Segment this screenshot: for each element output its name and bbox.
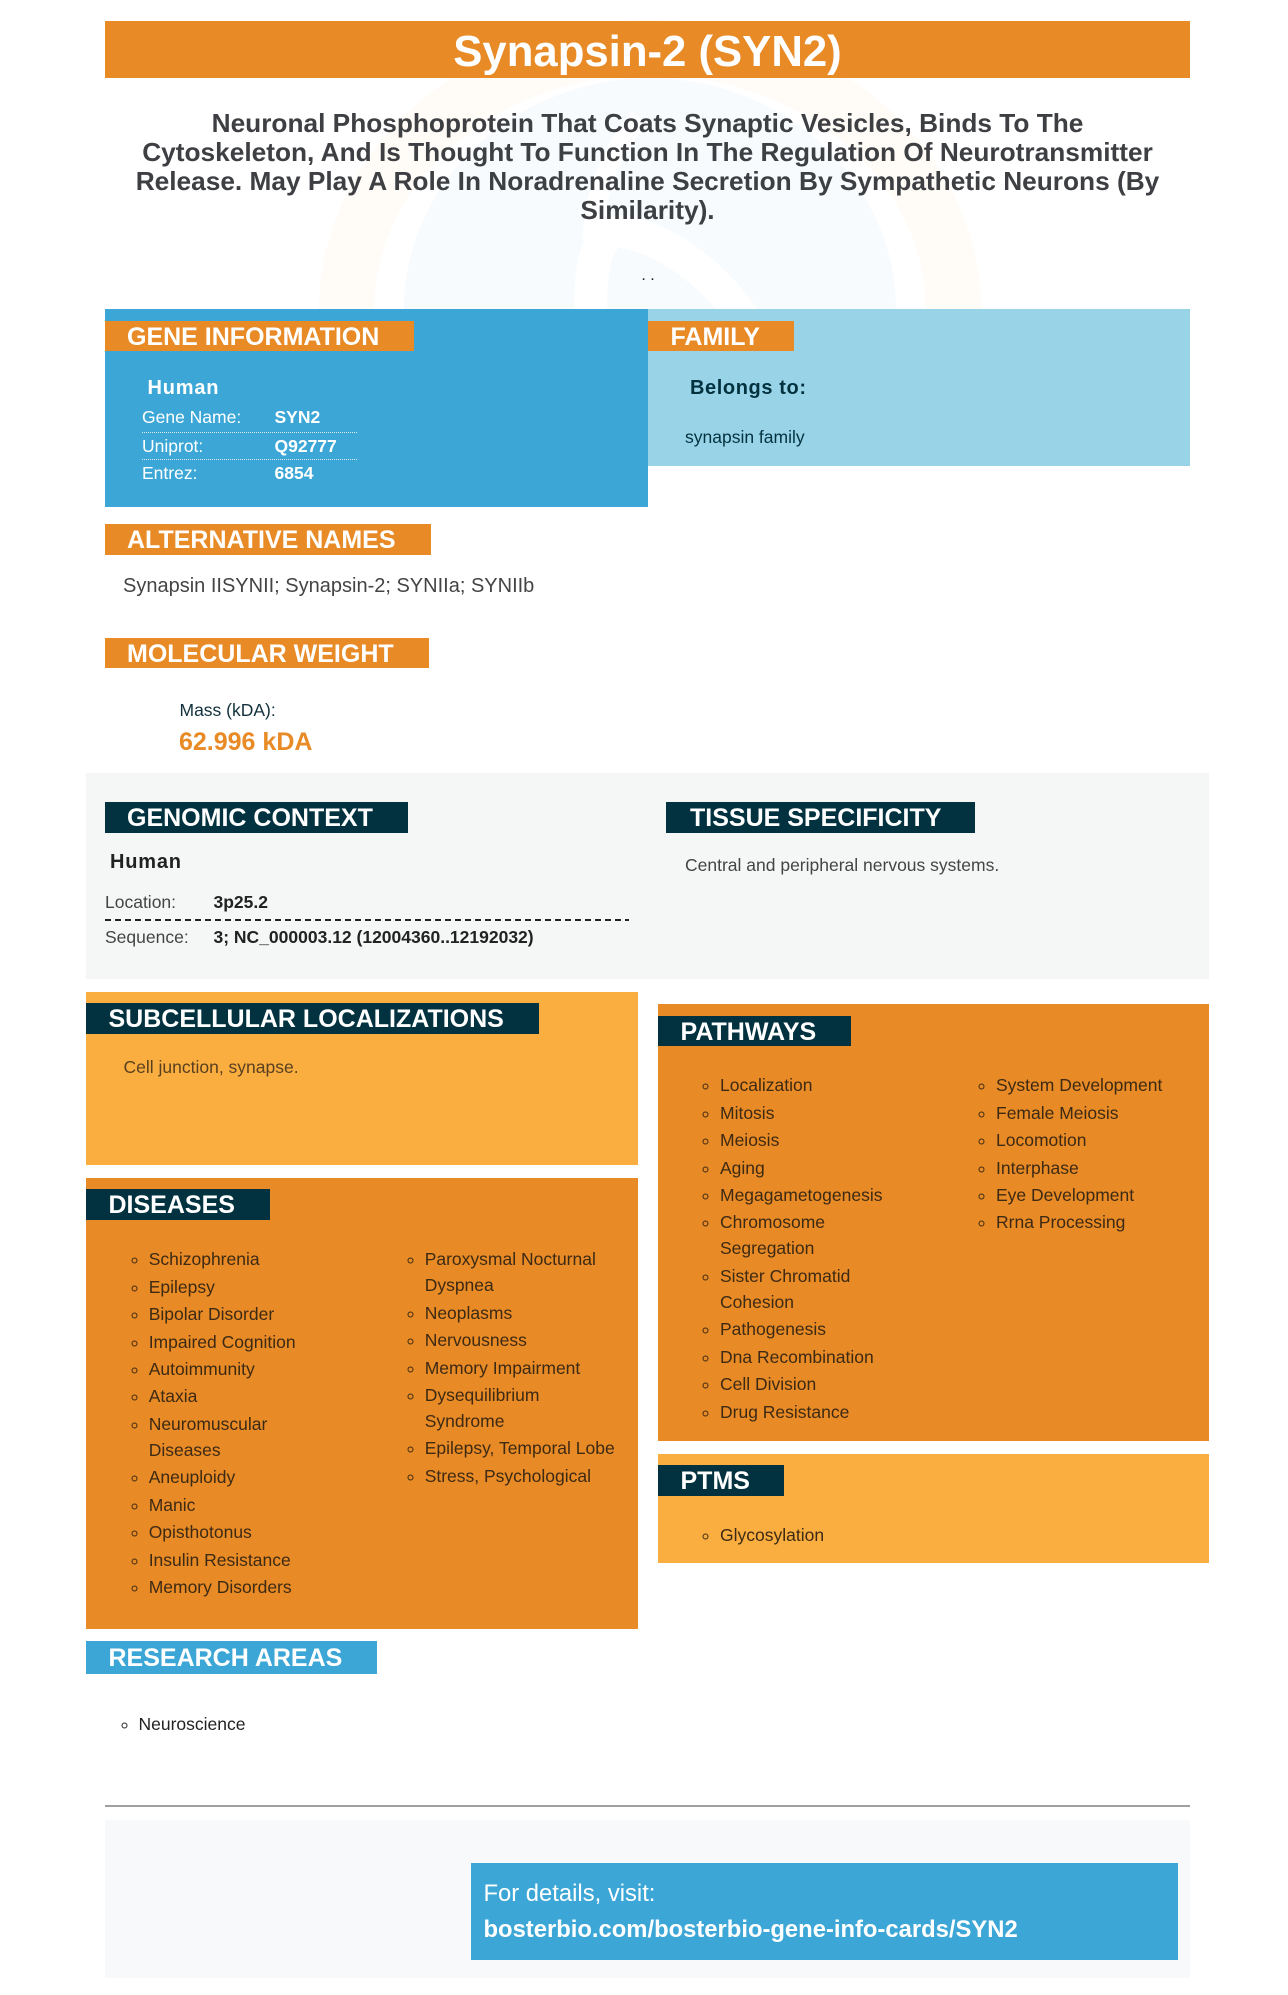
- belongs to label: Belongs to:: [690, 377, 807, 399]
- heading: alternative names: ALTERNATIVE NAMES: [127, 526, 396, 554]
- diseases list column 1: Memory Disorders: [149, 1577, 292, 1597]
- background watermark logo: [0, 0, 1288, 320]
- subtitle description: Release. May Play A Role In Noradrenaline Secretion By Sympathetic Neurons (By: [136, 166, 1159, 196]
- heading: tissue specificity: TISSUE SPECIFICITY: [690, 804, 941, 832]
- heading: family: [648, 321, 794, 351]
- heading: ptms: [658, 1465, 784, 1496]
- pathways list column 2: [978, 1075, 1162, 1232]
- heading: ptms: PTMS: [680, 1467, 750, 1495]
- heading: molecular weight: MOLECULAR WEIGHT: [127, 640, 394, 668]
- research areas list: Neuroscience: [138, 1714, 246, 1734]
- pathways list column 2: Locomotion: [996, 1130, 1086, 1150]
- diseases list column 1: Aneuploidy: [149, 1467, 235, 1487]
- pathways list column 2: Eye Development: [996, 1185, 1134, 1205]
- pathways list column 1: Drug Resistance: [720, 1402, 849, 1422]
- diseases list column 2: Syndrome: [425, 1411, 504, 1431]
- gene name row: Gene Name:: [142, 407, 241, 427]
- panel: subcellular localizations: [86, 992, 638, 1165]
- small dots text: . .: [641, 267, 655, 284]
- heading: pathways: [658, 1016, 851, 1046]
- family name: synapsin family: [685, 427, 805, 447]
- diseases list column 1: Impaired Cognition: [149, 1332, 296, 1352]
- diseases list column 2: Paroxysmal Nocturnal: [425, 1249, 596, 1269]
- pathways list column 1: Cell Division: [720, 1374, 816, 1394]
- uniprot row: Q92777: [274, 436, 337, 456]
- localization text: Cell junction, synapse.: [124, 1057, 299, 1077]
- heading: gene information: GENE INFORMATION: [127, 323, 379, 351]
- diseases list column 1: [132, 1249, 296, 1597]
- pathways list column 1: Localization: [720, 1075, 812, 1095]
- pathways list column 1: Aging: [720, 1158, 765, 1178]
- sequence row: 3; NC_000003.12 (12004360..12192032): [214, 927, 534, 947]
- gene name row: SYN2: [274, 407, 320, 427]
- subtitle description: [136, 108, 1159, 225]
- pathways list column 1: Chromosome: [720, 1212, 825, 1232]
- diseases list column 1: Bipolar Disorder: [149, 1304, 274, 1324]
- heading: diseases: DISEASES: [108, 1191, 235, 1219]
- uniprot row: Uniprot:: [142, 436, 203, 456]
- tissue specificity text: Central and peripheral nervous systems.: [685, 855, 999, 875]
- diseases list column 1: Insulin Resistance: [149, 1550, 291, 1570]
- diseases list column 2: [408, 1249, 615, 1486]
- sequence row: Sequence:: [105, 927, 189, 947]
- diseases list column 2: Memory Impairment: [425, 1358, 580, 1378]
- entrez row: [142, 463, 314, 483]
- panel: pathways: [658, 1004, 1209, 1441]
- diseases list column 1: Diseases: [149, 1440, 221, 1460]
- diseases list column 2: Dyspnea: [425, 1275, 494, 1295]
- pathways list column 1: Sister Chromatid: [720, 1266, 850, 1286]
- panel: ptms: [658, 1454, 1209, 1563]
- diseases list column 2: Epilepsy, Temporal Lobe: [425, 1438, 615, 1458]
- pathways list column 2: System Development: [996, 1075, 1162, 1095]
- heading: pathways: PATHWAYS: [680, 1018, 816, 1046]
- diseases list column 1: Manic: [149, 1495, 195, 1515]
- pathways list column 1: Cohesion: [720, 1292, 794, 1312]
- pathways list column 1: Pathogenesis: [720, 1319, 826, 1339]
- subtitle description: Cytoskeleton, And Is Thought To Function In The Regulation Of Neurotransmitter: [142, 137, 1153, 167]
- heading: family: FAMILY: [670, 323, 760, 351]
- diseases list column 1: Neuromuscular: [149, 1414, 267, 1434]
- panel: gene information: [105, 309, 648, 507]
- diseases list column 1: Epilepsy: [149, 1277, 215, 1297]
- pathways list column 2: Interphase: [996, 1158, 1079, 1178]
- species label: Human: [110, 851, 182, 873]
- species label: Human: [148, 377, 219, 399]
- location row: [105, 892, 268, 912]
- diseases list column 1: Ataxia: [149, 1386, 197, 1406]
- url: bosterbio.com/bosterbio-gene-info-cards/SYN2: [484, 1916, 1018, 1943]
- diseases list column 2: Stress, Psychological: [425, 1466, 591, 1486]
- diseases list column 1: Autoimmunity: [149, 1359, 255, 1379]
- alternative names text: Synapsin IISYNII; Synapsin-2; SYNIIa; SYNIIb: [123, 575, 534, 597]
- callout: details link: [471, 1863, 1178, 1960]
- entrez row: 6854: [274, 463, 313, 483]
- diseases list column 1: Schizophrenia: [149, 1249, 260, 1269]
- pathways list column 2: Rrna Processing: [996, 1212, 1125, 1232]
- visit label: For details, visit:: [484, 1880, 655, 1907]
- subtitle description: Similarity).: [580, 195, 715, 225]
- diseases list column 2: Dysequilibrium: [425, 1385, 539, 1405]
- title banner: Synapsin-2 (SYN2): [453, 27, 842, 76]
- pathways list column 2: Female Meiosis: [996, 1103, 1119, 1123]
- panel: genomic context and tissue specificity: [86, 773, 1209, 979]
- pathways list column 1: [702, 1075, 882, 1422]
- heading: genomic context: GENOMIC CONTEXT: [127, 804, 373, 832]
- diseases list column 2: Neoplasms: [425, 1303, 512, 1323]
- uniprot row: [142, 432, 357, 460]
- heading: subcellular localizations: SUBCELLULAR LOCALIZATIONS: [108, 1005, 504, 1033]
- location row: 3p25.2: [214, 892, 268, 912]
- mass label: Mass (kDA):: [180, 700, 276, 720]
- ptms list: Glycosylation: [720, 1525, 824, 1545]
- heading: research areas: RESEARCH AREAS: [108, 1644, 342, 1672]
- panel: family: [648, 309, 1190, 466]
- gene name row: [142, 407, 320, 427]
- pathways list column 1: Mitosis: [720, 1103, 774, 1123]
- subtitle description: Neuronal Phosphoprotein That Coats Synaptic Vesicles, Binds To The: [212, 108, 1083, 138]
- diseases list column 1: Opisthotonus: [149, 1522, 252, 1542]
- pathways list column 1: Megagametogenesis: [720, 1185, 882, 1205]
- entrez row: Entrez:: [142, 463, 197, 483]
- heading: research areas: [86, 1641, 377, 1674]
- heading: diseases: [86, 1189, 270, 1220]
- mass value: 62.996 kDA: [179, 728, 312, 756]
- panel: diseases: [86, 1178, 638, 1629]
- location row: Location:: [105, 892, 176, 912]
- title banner: [105, 21, 1190, 78]
- pathways list column 1: Meiosis: [720, 1130, 779, 1150]
- panel: footer: [105, 1820, 1190, 1978]
- diseases list column 2: Nervousness: [425, 1330, 527, 1350]
- pathways list column 1: Dna Recombination: [720, 1347, 874, 1367]
- dashed separator: [105, 919, 629, 921]
- pathways list column 1: Segregation: [720, 1238, 814, 1258]
